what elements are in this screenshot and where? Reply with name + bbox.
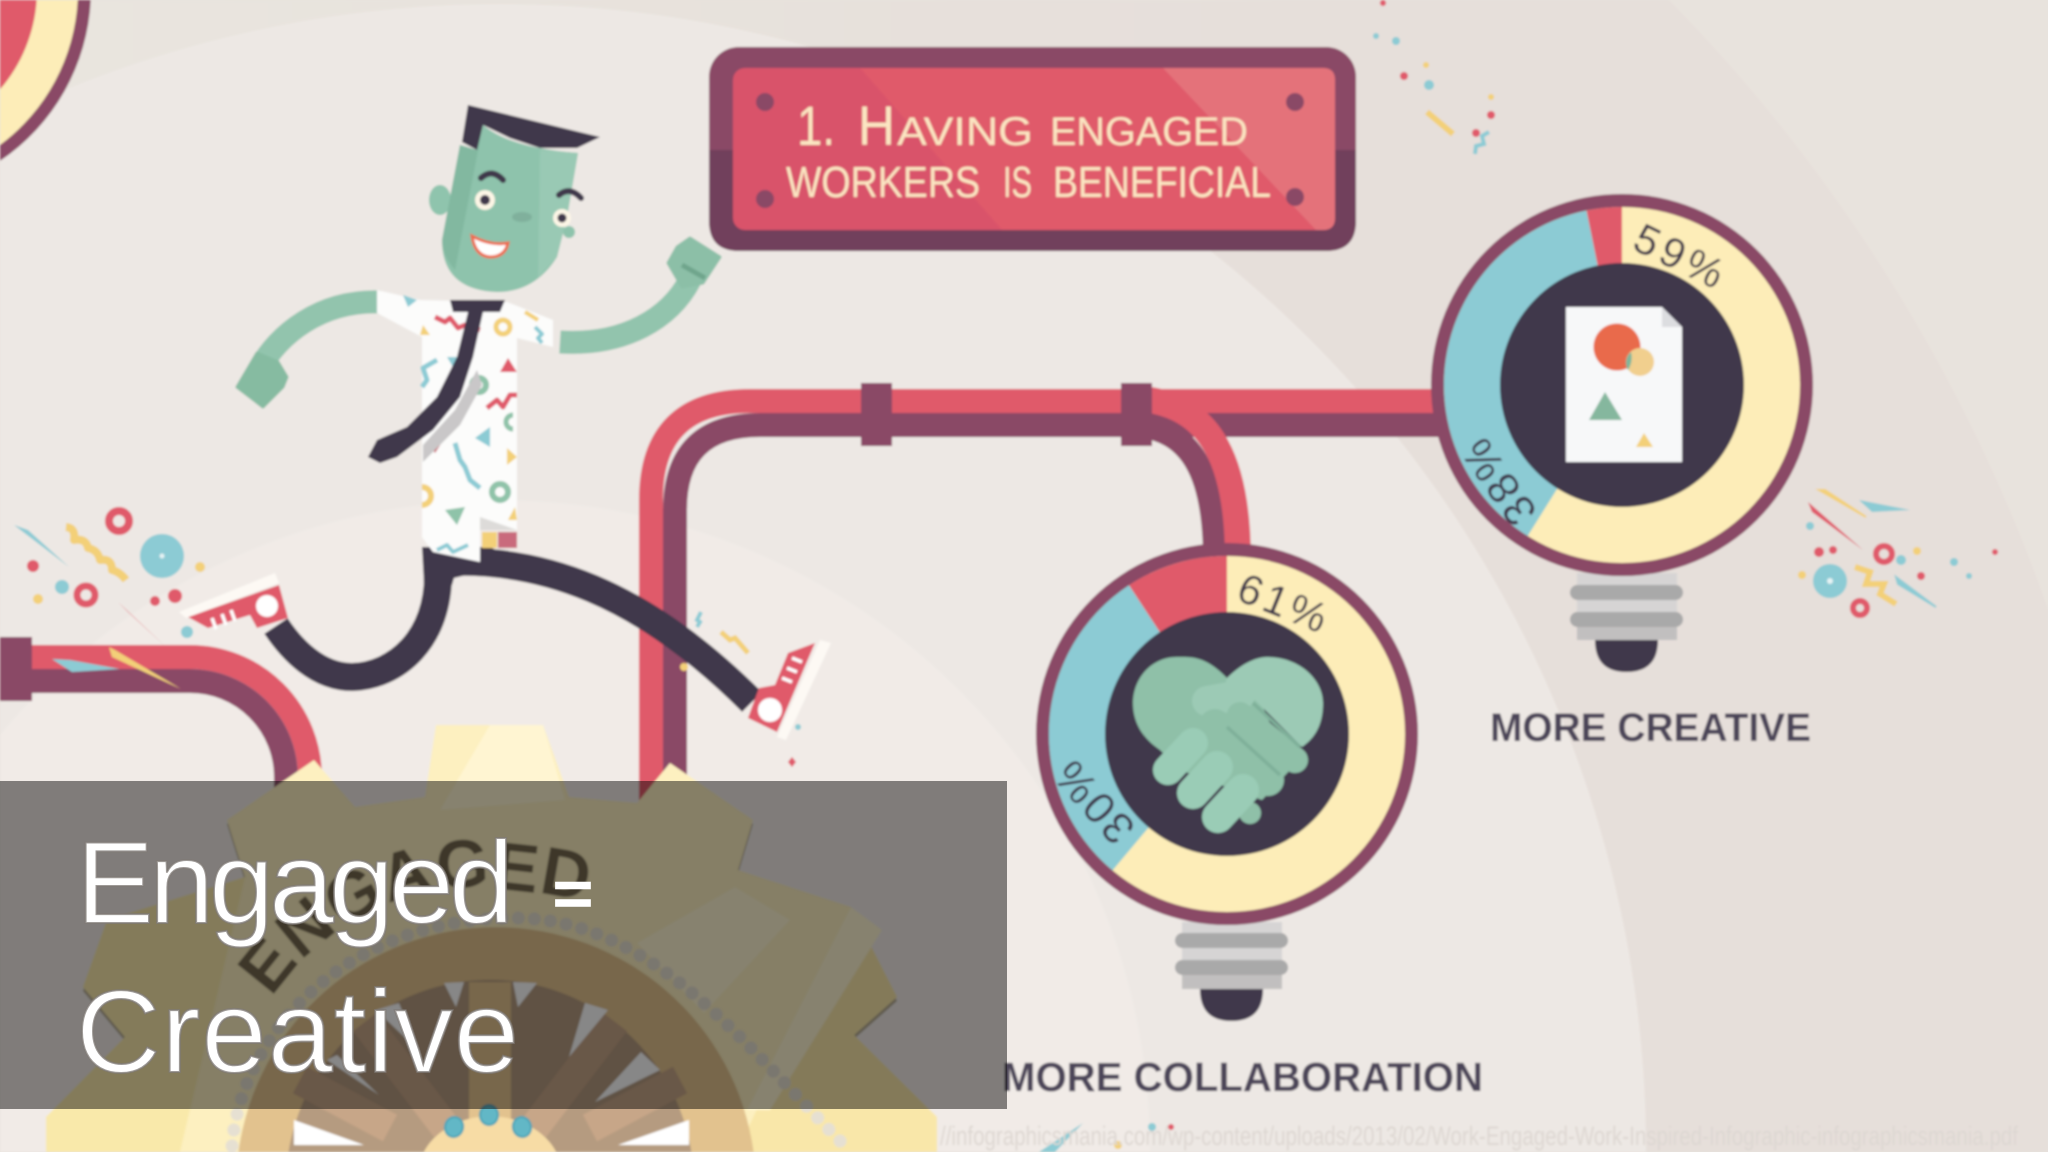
confetti: top right [1373,0,1495,154]
caption: Engaged =: Engaged [76,817,514,948]
plaque heading line 1: 1. [797,94,835,157]
bulb base [1570,573,1683,672]
gear shadow edge [46,729,937,1152]
caption: Creative: Creative [76,966,519,1097]
top-left circle badge [0,0,91,161]
plaque heading line 2: IS [1003,158,1032,207]
front arm [560,238,720,342]
pipe collars [861,383,1152,446]
wheel arch [238,927,754,1152]
head [429,105,600,292]
label 38%: 38% [1451,427,1547,534]
tie [368,300,505,463]
spokes [300,982,680,1128]
left hand [1133,657,1290,800]
shirt pattern [422,312,542,552]
hair [462,105,600,150]
label: more creative: MORE CREATIVE [1490,706,1811,750]
nose [512,212,532,222]
right fingers [1215,715,1295,780]
eyes [475,190,495,210]
mouth [472,236,508,257]
pipe: main trunk [651,401,1440,800]
legs [276,547,752,702]
gear label: ENGAGED [237,838,590,994]
front shoe [748,640,831,740]
pipe: left [0,637,310,800]
brows [481,173,503,180]
plaque heading line 2: WORKERS [786,158,980,207]
bulb: more creative [1431,194,1813,672]
plaque heading line 1: H [858,94,895,157]
dotted ring [232,918,845,1146]
confetti: bottom [1039,1123,1174,1152]
pipe: branch to lower bulb [1136,400,1238,560]
plaque heading line 2: BENEFICIAL [1053,158,1271,207]
plaque heading line 1: ENGAGED [1050,110,1248,154]
plaque heading line 1: AVING [897,110,1033,154]
document icon [1566,307,1682,462]
plaque heading line 2 [786,158,1271,207]
donut chart [1431,194,1813,576]
running man [179,105,831,740]
gear [45,724,938,1152]
confetti: right [1798,490,1998,615]
hub dots [443,1105,533,1139]
confetti: by front shoe [680,612,801,767]
handshake heart icon [1133,657,1323,824]
face [442,125,578,292]
gear body [46,725,937,1152]
pipes [0,383,1440,800]
finger creases [1227,703,1300,775]
caption: Engaged =: = [553,854,593,932]
rear shoe [179,573,288,629]
confetti: left [14,511,205,689]
right hand [1220,657,1323,747]
shirt [377,290,553,562]
wheel gaps [294,982,689,1145]
label 30%: 30% [1043,748,1145,853]
bulb: more collaboration [1036,543,1418,1021]
title plaque [709,47,1356,251]
plaque rivets [756,93,1304,208]
label: more collaboration: MORE COLLABORATION [1002,1054,1483,1100]
hub [424,1116,556,1152]
bulb base [1175,922,1288,1021]
donut chart [1036,543,1418,925]
thumb [1207,695,1240,701]
ear [429,185,451,215]
plaque heading line 1 [797,94,1248,157]
left fingers [1239,802,1261,824]
label 59%: 59% [1627,214,1736,300]
caption overlay [0,781,1007,1109]
label 61%: 61% [1231,564,1338,643]
back arm [237,302,380,407]
belt [482,532,497,548]
